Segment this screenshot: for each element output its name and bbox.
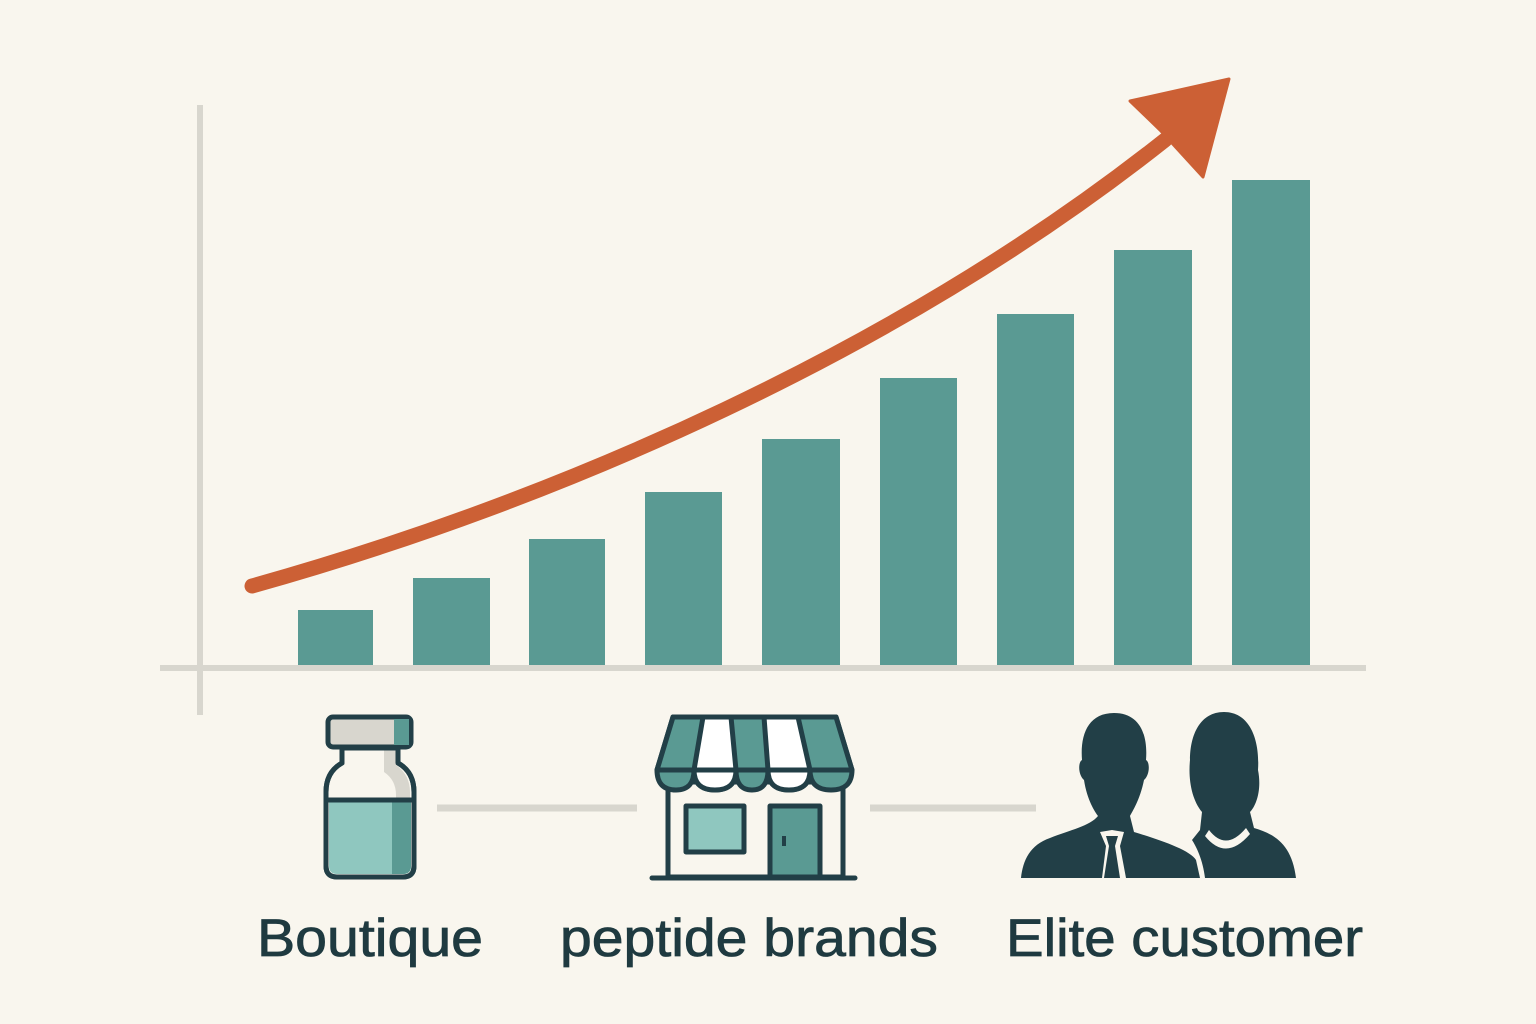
labels: [257, 909, 1363, 968]
label: peptide brands: peptide brands: [560, 909, 938, 968]
label: Elite customer: Elite customer: [1006, 909, 1363, 968]
label: Boutique: Boutique: [257, 909, 483, 968]
connector lines: [437, 804, 1036, 812]
icon: elite customers: [1021, 712, 1296, 878]
arrow: growth trend: [252, 79, 1229, 586]
bar chart: [298, 180, 1310, 665]
icon: storefront: [652, 717, 855, 878]
chart axes: [160, 105, 1366, 715]
icon: vial: [326, 717, 414, 877]
